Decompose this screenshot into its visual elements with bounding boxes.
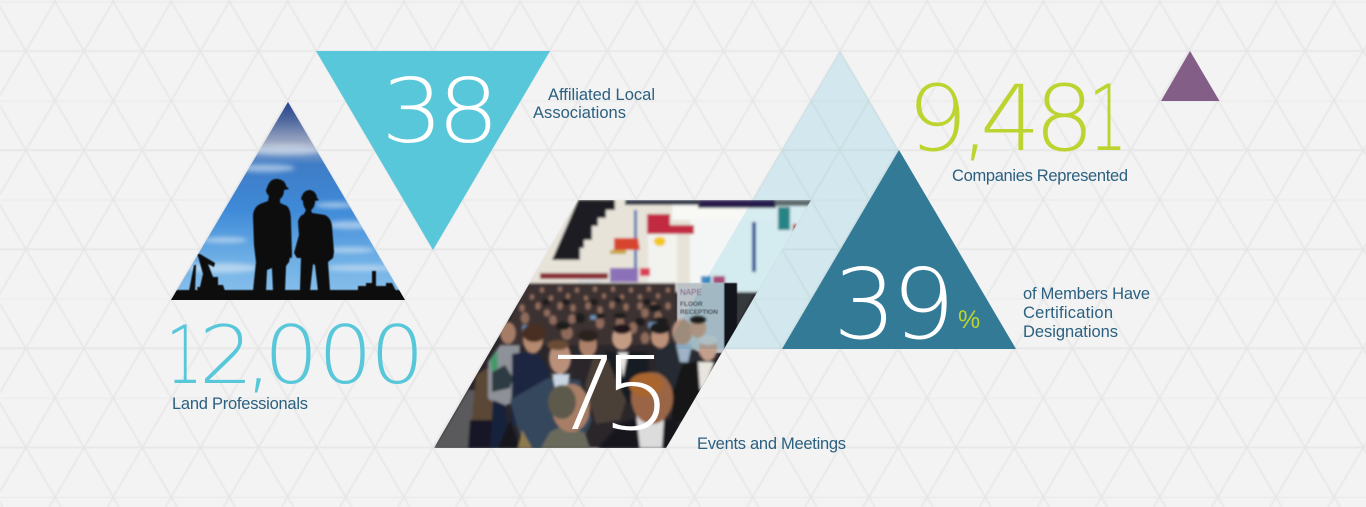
number: 39: 39 [833, 249, 955, 362]
label: members certification designations: Certification [1023, 304, 1113, 322]
icon: purple triangle [1161, 51, 1220, 101]
sign board: floor reception: FLOOR [680, 301, 703, 308]
sign board: floor reception: NAPE [680, 288, 702, 297]
sign board: floor reception: RECEPTION [680, 309, 718, 316]
label: events and meetings: Events and Meetings [697, 435, 846, 453]
icon: silhouette of two workers [170, 179, 406, 301]
label: land professionals: Land Professionals [172, 395, 308, 413]
panel: workers photo triangle [170, 100, 406, 301]
number: 12,000: 2,000 [199, 309, 425, 402]
label: companies represented: Companies Represented [952, 167, 1128, 185]
number: 9,481: 9,48 [907, 66, 1095, 172]
panel: 39 percent teal triangle [782, 150, 1016, 362]
panel: 38 cyan triangle [316, 51, 550, 250]
label: affiliated local associations: Affiliated Local [548, 86, 655, 104]
number: 75: 75 [549, 335, 672, 454]
number: 9,481: 1 [1089, 67, 1127, 172]
number: 12,000: 1 [166, 310, 203, 403]
number: 38: 38 [381, 61, 500, 164]
label: members certification designations: of Members Have [1023, 285, 1150, 303]
panel: events crowd photo [434, 200, 815, 448]
panel: pale triangle backdrop [665, 51, 1016, 349]
label: members certification designations [1023, 285, 1150, 341]
sign board: floor reception [677, 283, 737, 353]
label: members certification designations: Designations [1023, 323, 1118, 341]
label: affiliated local associations [533, 86, 655, 122]
percent sign: % [958, 306, 980, 334]
label: affiliated local associations: Associations [533, 104, 626, 122]
